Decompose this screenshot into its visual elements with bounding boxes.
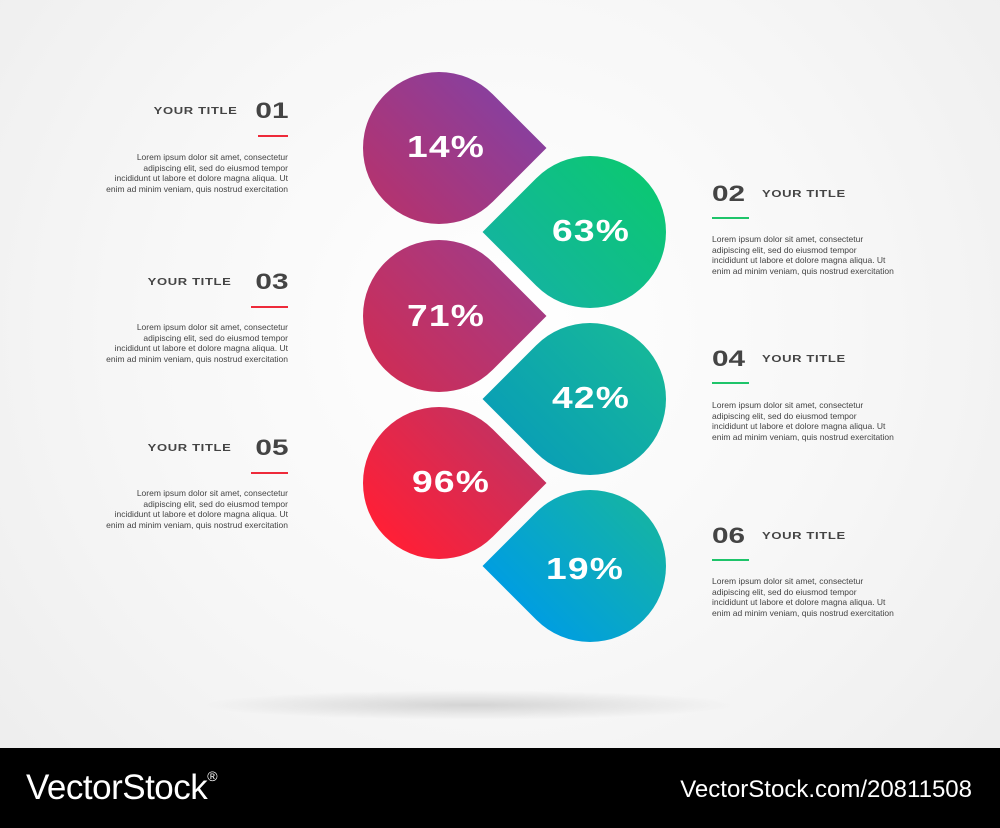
- text: Lorem ipsum dolor sit amet, consectetur: [712, 234, 863, 244]
- text: incididunt ut labore et dolore magna aliqua. Ut: [115, 343, 288, 353]
- text block 02: [712, 181, 894, 276]
- text block 01: [106, 98, 288, 194]
- label 96%: 96%: [412, 464, 490, 499]
- text: incididunt ut labore et dolore magna aliqua. Ut: [115, 509, 288, 519]
- text: enim ad minim veniam, quis nostrud exercitation: [106, 354, 288, 364]
- label 63%: 63%: [552, 213, 630, 248]
- text block 06: [712, 523, 894, 618]
- text: adipiscing elit, sed do eiusmod tempor: [712, 245, 857, 255]
- footer bar: [0, 748, 1000, 828]
- text: adipiscing elit, sed do eiusmod tempor: [143, 163, 288, 173]
- drop 3: 71%: [332, 209, 546, 423]
- text block 04: [712, 346, 894, 442]
- drop 5: 96%: [332, 376, 546, 590]
- text: adipiscing elit, sed do eiusmod tempor: [143, 499, 288, 509]
- text: Lorem ipsum dolor sit amet, consectetur: [137, 488, 288, 498]
- text: incididunt ut labore et dolore magna aliqua. Ut: [115, 173, 288, 183]
- label 19%: 19%: [546, 551, 624, 586]
- footer brand: VectorStock®: [26, 768, 217, 807]
- text: enim ad minim veniam, quis nostrud exercitation: [712, 608, 894, 618]
- text: YOUR TITLE: [762, 531, 846, 542]
- text block 03: [106, 269, 288, 364]
- text: 06: [712, 523, 745, 548]
- text: adipiscing elit, sed do eiusmod tempor: [143, 333, 288, 343]
- text: incididunt ut labore et dolore magna aliqua. Ut: [712, 597, 885, 607]
- text: enim ad minim veniam, quis nostrud exercitation: [712, 432, 894, 442]
- drop 2: 63%: [483, 125, 697, 339]
- text: adipiscing elit, sed do eiusmod tempor: [712, 411, 857, 421]
- text: YOUR TITLE: [153, 106, 237, 117]
- drop 6: 19%: [483, 459, 697, 673]
- text: enim ad minim veniam, quis nostrud exercitation: [106, 184, 288, 194]
- text: 02: [712, 181, 745, 206]
- text: Lorem ipsum dolor sit amet, consectetur: [712, 576, 863, 586]
- text: YOUR TITLE: [762, 354, 846, 365]
- drop 1: 14%: [332, 41, 546, 255]
- text: 05: [255, 435, 288, 460]
- footer id: VectorStock.com/20811508: [680, 776, 972, 803]
- label 14%: 14%: [407, 129, 485, 164]
- text: incididunt ut labore et dolore magna aliqua. Ut: [712, 255, 885, 265]
- text: 03: [255, 269, 288, 294]
- label 71%: 71%: [407, 298, 485, 333]
- text: YOUR TITLE: [147, 277, 231, 288]
- text: 01: [255, 98, 288, 123]
- text: Lorem ipsum dolor sit amet, consectetur: [137, 152, 288, 162]
- text: adipiscing elit, sed do eiusmod tempor: [712, 587, 857, 597]
- drop 4: 42%: [483, 292, 697, 506]
- text: YOUR TITLE: [147, 443, 231, 454]
- text block 05: [106, 435, 288, 530]
- text: Lorem ipsum dolor sit amet, consectetur: [137, 322, 288, 332]
- text: incididunt ut labore et dolore magna aliqua. Ut: [712, 421, 885, 431]
- text: Lorem ipsum dolor sit amet, consectetur: [712, 400, 863, 410]
- text: 04: [712, 346, 745, 371]
- label 42%: 42%: [552, 380, 630, 415]
- text: enim ad minim veniam, quis nostrud exercitation: [106, 520, 288, 530]
- text: enim ad minim veniam, quis nostrud exercitation: [712, 266, 894, 276]
- text: YOUR TITLE: [762, 189, 846, 200]
- floor shadow: [200, 690, 740, 720]
